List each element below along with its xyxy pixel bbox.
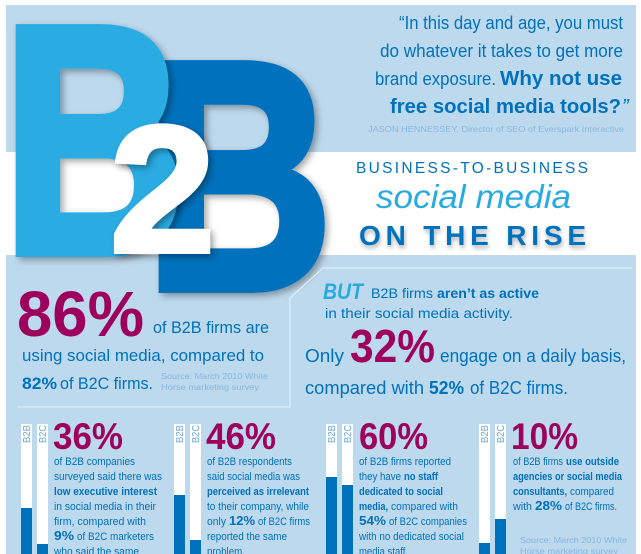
text: 36 percent: of B2C marketers (77, 531, 154, 543)
text: 46 percent: of B2B respondents (207, 456, 292, 468)
text: 36 percent: firm, compared with (54, 516, 146, 528)
bar chart: column 3 (326, 424, 354, 554)
text: 46 percent: 46% (206, 416, 276, 457)
text: 60 percent: they have (359, 471, 401, 483)
statistic: 32 percent daily: in their social media activity. (325, 305, 513, 321)
text: 60 percent: of B2C companies (389, 516, 467, 528)
statistic: 32 percent daily (305, 279, 626, 398)
quote attribution: JASON HENNESSEY, Director of SEO of Everspark Interactive (368, 124, 624, 134)
title: ON THE RISE (359, 220, 586, 251)
statistic: 86 percent: of B2C firms. (60, 374, 153, 393)
text: 36 percent (53, 416, 162, 554)
text: 60 percent (358, 416, 467, 554)
source note: columns (520, 535, 627, 554)
white numeral 2: 2 (110, 90, 215, 291)
text: 10 percent: compared (570, 486, 614, 498)
quote: do whatever it takes to get more (380, 41, 623, 61)
text: 10 percent (511, 416, 623, 513)
statistic: 86 percent: of B2B firms are (153, 318, 269, 337)
quote: Why not use (500, 68, 622, 90)
text: 10 percent: with (512, 501, 532, 513)
text: 46 percent (206, 416, 310, 554)
text: 36 percent: surveyed said there was (54, 471, 162, 483)
statistic: 86 percent: 86% (17, 278, 144, 350)
statistic: 86 percent (17, 278, 269, 393)
text: 10 percent: consultants, (513, 486, 567, 498)
text: 10 percent: 10% (511, 416, 578, 457)
statistic: 32 percent daily: aren’t as active (437, 285, 539, 301)
panel: lower statistics background (6, 255, 636, 554)
bar chart: column 2: B2B (175, 425, 186, 443)
bar chart: column 2: B2C (191, 425, 202, 443)
text: 60 percent: media, (359, 501, 388, 513)
statistic: 86 percent: 82% (22, 374, 57, 393)
text: 60 percent: no staff (404, 471, 438, 483)
text: 46 percent: 12% (229, 513, 255, 528)
title: social media (376, 178, 571, 215)
statistic: 32 percent daily: engage on a daily basis, (440, 346, 626, 366)
quote: free social media tools? (390, 96, 621, 118)
statistic: 32 percent daily: of B2C firms. (470, 378, 568, 398)
bar chart: column 4 (479, 424, 507, 554)
quote: ” (622, 96, 630, 118)
text: 46 percent: said social media was (207, 471, 300, 483)
bar chart: column 1: B2B (22, 425, 33, 443)
bar chart: column 4: B2B (480, 425, 491, 443)
bar chart: column 2 (174, 424, 202, 554)
bar chart: column 1 (21, 424, 49, 554)
bar chart: column 4: B2C (496, 425, 507, 443)
quote: “In this day and age, you must (399, 13, 623, 33)
text: 46 percent: to their company, while (207, 501, 309, 513)
text: 10 percent: of B2B firms (513, 456, 563, 468)
text: 46 percent: reported the same (207, 531, 287, 543)
text: 60 percent: with no dedicated social (358, 531, 464, 543)
text: 36 percent: 36% (53, 416, 123, 457)
quote: brand exposure. (375, 69, 496, 89)
title: BUSINESS-TO-BUSINESS (356, 160, 588, 177)
statistic: 32 percent daily: compared with (305, 378, 424, 398)
divider lines (18, 268, 632, 407)
source note: Horse marketing survey (161, 382, 260, 392)
bar chart: column 1: B2C (38, 425, 49, 443)
source note: Source: March 2010 White (161, 371, 268, 381)
text: 10 percent: use outside (566, 456, 619, 468)
text: 10 percent: of B2C firms. (565, 501, 617, 513)
text: 36 percent: low executive interest (54, 486, 157, 498)
text: 46 percent: only (207, 516, 226, 528)
title (356, 160, 588, 251)
text: 36 percent: 9% (54, 528, 74, 543)
text: 46 percent: perceived as irrelevant (207, 486, 309, 498)
statistic: 32 percent daily: 32% (350, 320, 435, 372)
text: 36 percent: of B2B companies (54, 456, 135, 468)
text: 60 percent: 60% (359, 416, 428, 457)
text: 60 percent: of B2B firms reported (359, 456, 451, 468)
statistic: 32 percent daily: 52% (429, 378, 464, 398)
quote (375, 13, 630, 118)
text: 60 percent: 54% (359, 513, 386, 528)
statistic: 32 percent daily: B2B firms (371, 285, 433, 301)
statistic: 32 percent daily: Only (305, 346, 344, 366)
text: 10 percent: agencies or social media (513, 471, 623, 483)
text: 36 percent: in social media in their (54, 501, 156, 513)
bar chart: column 3: B2B (327, 425, 338, 443)
text: 46 percent: of B2C firms (258, 516, 310, 528)
text: 60 percent: compared with (391, 501, 458, 513)
text: 10 percent: 28% (535, 498, 562, 513)
bar chart: column 3: B2C (343, 425, 354, 443)
text: 60 percent: dedicated to social (359, 486, 443, 498)
statistic: 86 percent: using social media, compared to (22, 346, 264, 365)
source note (161, 371, 268, 392)
panel: top quote background (6, 5, 636, 152)
dark B2B letter: B (145, 0, 332, 358)
source note: columns: Source: March 2010 White (520, 535, 627, 545)
statistic: 32 percent daily: BUT (323, 279, 364, 304)
